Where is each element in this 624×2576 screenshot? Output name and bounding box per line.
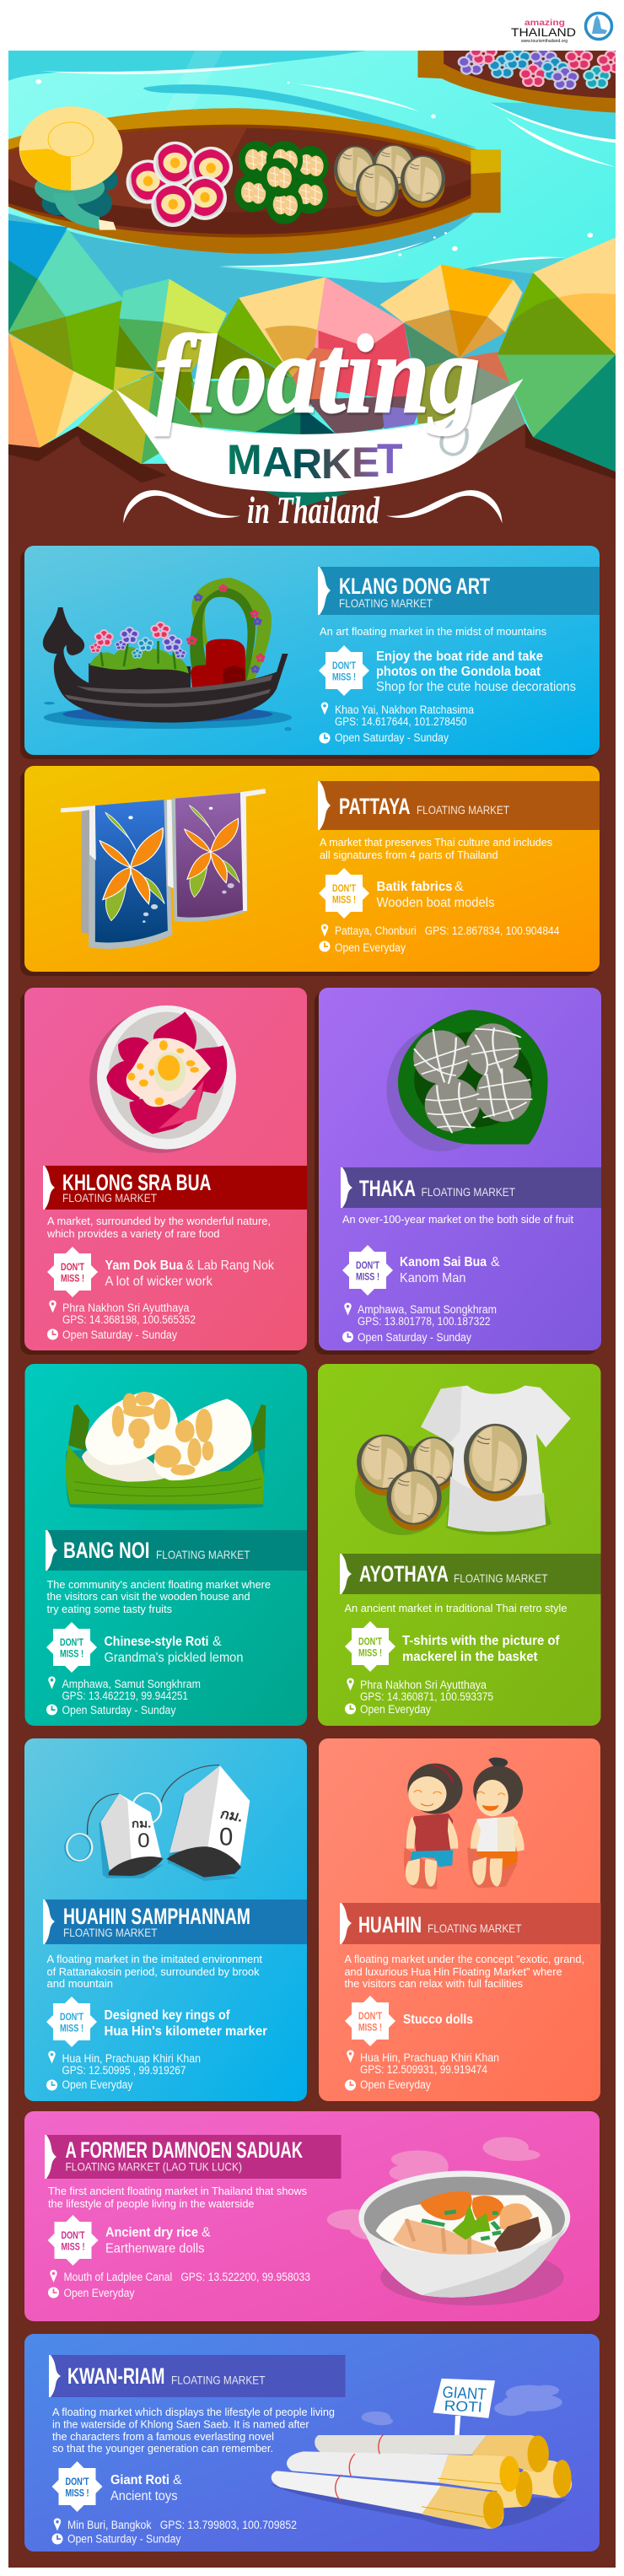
badge: don't miss: DON'T — [66, 2476, 89, 2487]
description — [47, 1578, 271, 1615]
header band: PATTAYA — [339, 794, 410, 819]
highlights: photos on the Gondola boat — [376, 665, 541, 679]
location — [347, 1679, 493, 1703]
location: GPS: 14.368198, 100.565352 — [62, 1313, 196, 1326]
umbrellas — [8, 229, 616, 507]
badge: don't miss: DON'T — [61, 2229, 85, 2241]
icon: kilometer marker key rings: 0 — [219, 1823, 233, 1851]
highlights: Kanom Sai Bua — [400, 1255, 487, 1269]
highlights: Kanom Man — [400, 1271, 465, 1285]
panel: Huahin Samphannam — [24, 1738, 307, 2101]
badge: don't miss: MISS ! — [358, 2021, 382, 2033]
badge: don't miss: MISS ! — [356, 1270, 379, 1282]
badge: don't miss: DON'T — [332, 882, 357, 894]
badge: don't miss — [319, 645, 369, 696]
highlights: mackerel in the basket — [402, 1650, 538, 1664]
highlights: & Lab Rang Nok — [186, 1258, 275, 1273]
header band — [318, 567, 600, 615]
panel: Pattaya — [20, 766, 600, 976]
location: GPS: 14.360871, 100.593375 — [360, 1690, 493, 1703]
title — [155, 312, 480, 531]
title: in Thailand — [247, 488, 380, 531]
icon: batik fabrics — [61, 789, 266, 949]
location: Pattaya, Chonburi GPS: 12.867834, 100.904844 — [335, 924, 560, 937]
badge: don't miss: MISS ! — [66, 2487, 89, 2498]
description: so that the younger generation can remember. — [52, 2442, 273, 2455]
highlights — [105, 1635, 243, 1665]
main boat — [8, 108, 501, 254]
location — [48, 2051, 201, 2077]
badge: don't miss: MISS ! — [332, 671, 356, 683]
header band — [43, 1166, 307, 1210]
icon: kilometer marker key rings: 0 — [137, 1830, 150, 1852]
badge: don't miss: DON'T — [60, 2011, 84, 2023]
highlights: & — [491, 1255, 500, 1269]
title: floating — [155, 312, 480, 436]
location: GPS: 13.462219, 99.944251 — [62, 1689, 188, 1702]
panel: Ayothaya — [318, 1364, 600, 1726]
badge: don't miss — [52, 2461, 103, 2512]
description: the lifestyle of people living in the waterside — [48, 2197, 255, 2210]
panel: Kwan-Riam — [24, 2334, 600, 2552]
header band — [46, 1530, 307, 1571]
description: the characters from a famous everlasting novel — [52, 2430, 274, 2443]
description: of Rattanakosin period, surrounded by brook — [47, 1965, 260, 1978]
location: Khao Yai, Nakhon Ratchasima — [335, 703, 474, 716]
location: Hua Hin, Prachuap Khiri Khan — [360, 2051, 499, 2064]
location — [321, 702, 474, 728]
location: Hua Hin, Prachuap Khiri Khan — [62, 2052, 201, 2065]
highlights: Stucco dolls — [403, 2013, 473, 2027]
icon: kilometer marker key rings — [66, 1765, 250, 1881]
location: Phra Nakhon Sri Ayutthaya — [360, 1679, 487, 1691]
icon: kilometer marker key rings: กม. — [218, 1807, 245, 1825]
highlights: Wooden boat models — [376, 896, 494, 910]
badge: don't miss — [345, 1996, 395, 2046]
header band: FLOATING MARKET — [339, 596, 433, 610]
icon: t-shirt and mackerel — [355, 1386, 571, 1535]
description: The first ancient floating market in Thailand that shows — [48, 2185, 307, 2197]
highlights: Giant Roti — [110, 2473, 169, 2487]
header band — [43, 1900, 307, 1944]
icon: gondola — [43, 578, 292, 731]
swashes — [123, 490, 503, 523]
description: An art floating market in the midst of mountains — [320, 625, 546, 638]
header band: KWAN-RIAM — [67, 2363, 165, 2389]
header band — [340, 1554, 600, 1594]
highlights — [376, 649, 576, 694]
icon: giant roti — [271, 2379, 572, 2529]
location: GPS: 14.617644, 101.278450 — [335, 715, 467, 728]
highlights: A lot of wicker work — [105, 1275, 213, 1289]
badge: don't miss: DON'T — [358, 1636, 383, 1647]
header band: FLOATING MARKET — [62, 1191, 157, 1204]
description: which provides a variety of rare food — [46, 1227, 220, 1240]
highlights — [105, 2225, 211, 2255]
description: and luxurious Hua Hin Floating Market" where — [344, 1965, 562, 1978]
panel: Bang Noi — [25, 1364, 307, 1726]
description — [46, 1215, 271, 1240]
badge: don't miss: DON'T — [358, 2010, 383, 2022]
opening hours: Open Saturday - Sunday — [67, 2532, 181, 2546]
description: A floating market in the imitated environment — [47, 1953, 262, 1965]
badge: don't miss: MISS ! — [61, 1272, 84, 1284]
header band: FLOATING MARKET — [454, 1571, 548, 1585]
description: A market that preserves Thai culture and includes — [320, 836, 552, 849]
far boat with flowers — [418, 51, 616, 113]
icon: kanom on leaf — [386, 1010, 548, 1151]
highlights: & — [455, 880, 464, 894]
header band: FLOATING MARKET — [156, 1548, 250, 1561]
highlights: Batik fabrics — [376, 880, 453, 894]
location: Amphawa, Samut Songkhram — [62, 1678, 201, 1690]
icon: giant roti: GIANT — [442, 2383, 487, 2403]
description — [47, 1953, 262, 1990]
badge: don't miss — [342, 1245, 393, 1296]
brown ground — [8, 423, 597, 464]
description: A floating market under the concept "exotic, grand, — [344, 1953, 584, 1965]
header band — [45, 2135, 341, 2179]
description: A floating market which displays the lifestyle of people living — [52, 2406, 335, 2418]
description: The community's ancient floating market where — [47, 1578, 271, 1591]
badge: don't miss: MISS ! — [60, 2023, 83, 2034]
header band: AYOTHAYA — [359, 1561, 449, 1587]
opening hours: Open Everyday — [62, 2078, 133, 2091]
header band — [318, 781, 600, 830]
highlights: Shop for the cute house decorations — [376, 680, 576, 694]
badge: don't miss — [46, 1622, 97, 1673]
header band: HUAHIN SAMPHANNAM — [63, 1904, 250, 1929]
header band: A FORMER DAMNOEN SADUAK — [66, 2137, 303, 2163]
highlights — [110, 2473, 182, 2503]
badge: don't miss — [46, 1997, 97, 2047]
highlights: Grandma's pickled lemon — [105, 1651, 243, 1665]
g tail on ribbon — [441, 421, 467, 455]
header band: FLOATING MARKET (LAO TUK LUCK) — [66, 2159, 242, 2173]
highlights: Yam Dok Bua — [105, 1258, 183, 1273]
badge: don't miss — [47, 2215, 98, 2266]
location: Mouth of Ladplee Canal GPS: 13.522200, 99.958033 — [64, 2271, 310, 2283]
header band: FLOATING MARKET — [171, 2374, 266, 2387]
highlights — [400, 1255, 500, 1285]
logos: amazing — [524, 19, 565, 28]
logos: www.tourismthailand.org — [521, 39, 568, 44]
description: An over-100-year market on the both side of fruit — [342, 1213, 573, 1226]
opening hours: Open Everyday — [64, 2287, 135, 2299]
panel: Klang Dong Art — [20, 546, 600, 759]
location: Amphawa, Samut Songkhram — [358, 1303, 497, 1316]
location — [48, 1677, 201, 1702]
opening hours: Open Everyday — [335, 941, 406, 954]
description: An ancient market in traditional Thai retro style — [344, 1602, 567, 1614]
highlights — [105, 1258, 275, 1289]
badge: don't miss — [47, 1247, 98, 1297]
header band — [49, 2355, 346, 2397]
icon: rice bowl — [327, 2137, 570, 2305]
icon: roti on banana leaf — [66, 1392, 266, 1510]
description: try eating some tasty fruits — [47, 1603, 172, 1615]
header band: THAKA — [359, 1176, 416, 1201]
badge: don't miss: MISS ! — [358, 1646, 382, 1658]
opening hours: Open Saturday - Sunday — [62, 1328, 177, 1341]
person in hat — [19, 106, 122, 230]
panel: Khlong Sra Bua — [20, 988, 307, 1355]
opening hours: Open Everyday — [360, 2078, 431, 2091]
title: MARKET — [227, 435, 403, 488]
highlights: T-shirts with the picture of — [402, 1634, 560, 1648]
opening hours: Open Everyday — [360, 1703, 431, 1716]
description: in the waterside of Khlong Saen Saeb. It is named after — [52, 2417, 309, 2431]
description: A market, surrounded by the wonderful nature, — [47, 1215, 271, 1227]
highlights: & — [173, 2473, 182, 2487]
location — [344, 1302, 497, 1328]
logos — [511, 13, 612, 44]
badge: don't miss: DON'T — [61, 1261, 85, 1273]
logos: THAILAND — [511, 25, 576, 39]
header band: BANG NOI — [63, 1538, 150, 1563]
badge: don't miss: DON'T — [60, 1636, 84, 1648]
location: GPS: 12.50995 , 99.919267 — [62, 2064, 186, 2077]
location: GPS: 12.509931, 99.919474 — [360, 2063, 487, 2076]
header band: HUAHIN — [358, 1912, 422, 1937]
opening hours: Open Saturday - Sunday — [358, 1331, 471, 1344]
description: the visitors can relax with full facilities — [344, 1977, 523, 1990]
panel: Thaka — [315, 988, 601, 1355]
highlights — [376, 880, 494, 910]
opening hours: Open Saturday - Sunday — [62, 1704, 176, 1716]
header band: FLOATING MARKET — [428, 1921, 522, 1935]
header band: FLOATING MARKET — [63, 1926, 158, 1939]
icon: kilometer marker key rings: กม. — [132, 1819, 151, 1830]
location — [49, 1301, 196, 1326]
description — [320, 836, 552, 861]
header band — [340, 1903, 600, 1944]
badge: don't miss: MISS ! — [61, 2240, 84, 2252]
badge: don't miss — [345, 1621, 395, 1672]
icon: lotus plate — [89, 1005, 236, 1153]
badge: don't miss: DON'T — [332, 660, 357, 671]
panel: A Former Damnoen Saduak — [24, 2111, 600, 2321]
header band: FLOATING MARKET — [422, 1185, 515, 1199]
highlights: Earthenware dolls — [105, 2242, 204, 2255]
header band: KHLONG SRA BUA — [62, 1170, 211, 1195]
description — [344, 1953, 584, 1990]
badge: don't miss: DON'T — [356, 1259, 380, 1271]
description: and mountain — [47, 1977, 113, 1990]
location: Phra Nakhon Sri Ayutthaya — [62, 1301, 190, 1314]
highlights: Chinese-style Roti — [105, 1635, 209, 1649]
opening hours: Open Saturday - Sunday — [335, 731, 449, 744]
water — [8, 51, 616, 464]
description: the visitors can visit the wooden house and — [47, 1590, 250, 1603]
location: GPS: 13.801778, 100.187322 — [358, 1315, 491, 1328]
highlights: Hua Hin's kilometer marker — [105, 2024, 267, 2039]
badge: don't miss — [319, 868, 369, 919]
icon: giant roti: ROTI — [444, 2398, 483, 2416]
description — [48, 2185, 307, 2210]
highlights: Enjoy the boat ride and take — [376, 649, 543, 664]
header band — [341, 1167, 601, 1208]
highlights: Designed key rings of — [105, 2008, 230, 2023]
highlights: & — [202, 2225, 211, 2240]
location — [347, 2050, 499, 2076]
panel: Huahin — [319, 1738, 600, 2101]
location: Min Buri, Bangkok GPS: 13.799803, 100.709852 — [67, 2519, 297, 2531]
description: all signatures from 4 parts of Thailand — [320, 849, 498, 861]
hero illustration — [8, 42, 624, 540]
highlights: & — [212, 1635, 222, 1649]
highlights: Ancient toys — [110, 2489, 177, 2503]
header band: FLOATING MARKET — [417, 803, 509, 816]
ribbon — [116, 379, 524, 493]
highlights — [402, 1634, 560, 1664]
highlights: Ancient dry rice — [105, 2225, 198, 2240]
header band: KLANG DONG ART — [339, 574, 490, 599]
badge: don't miss: MISS ! — [60, 1648, 83, 1660]
icon: stucco dolls — [404, 1758, 524, 1889]
highlights — [105, 2008, 267, 2039]
badge: don't miss: MISS ! — [332, 894, 356, 906]
description — [52, 2406, 335, 2455]
